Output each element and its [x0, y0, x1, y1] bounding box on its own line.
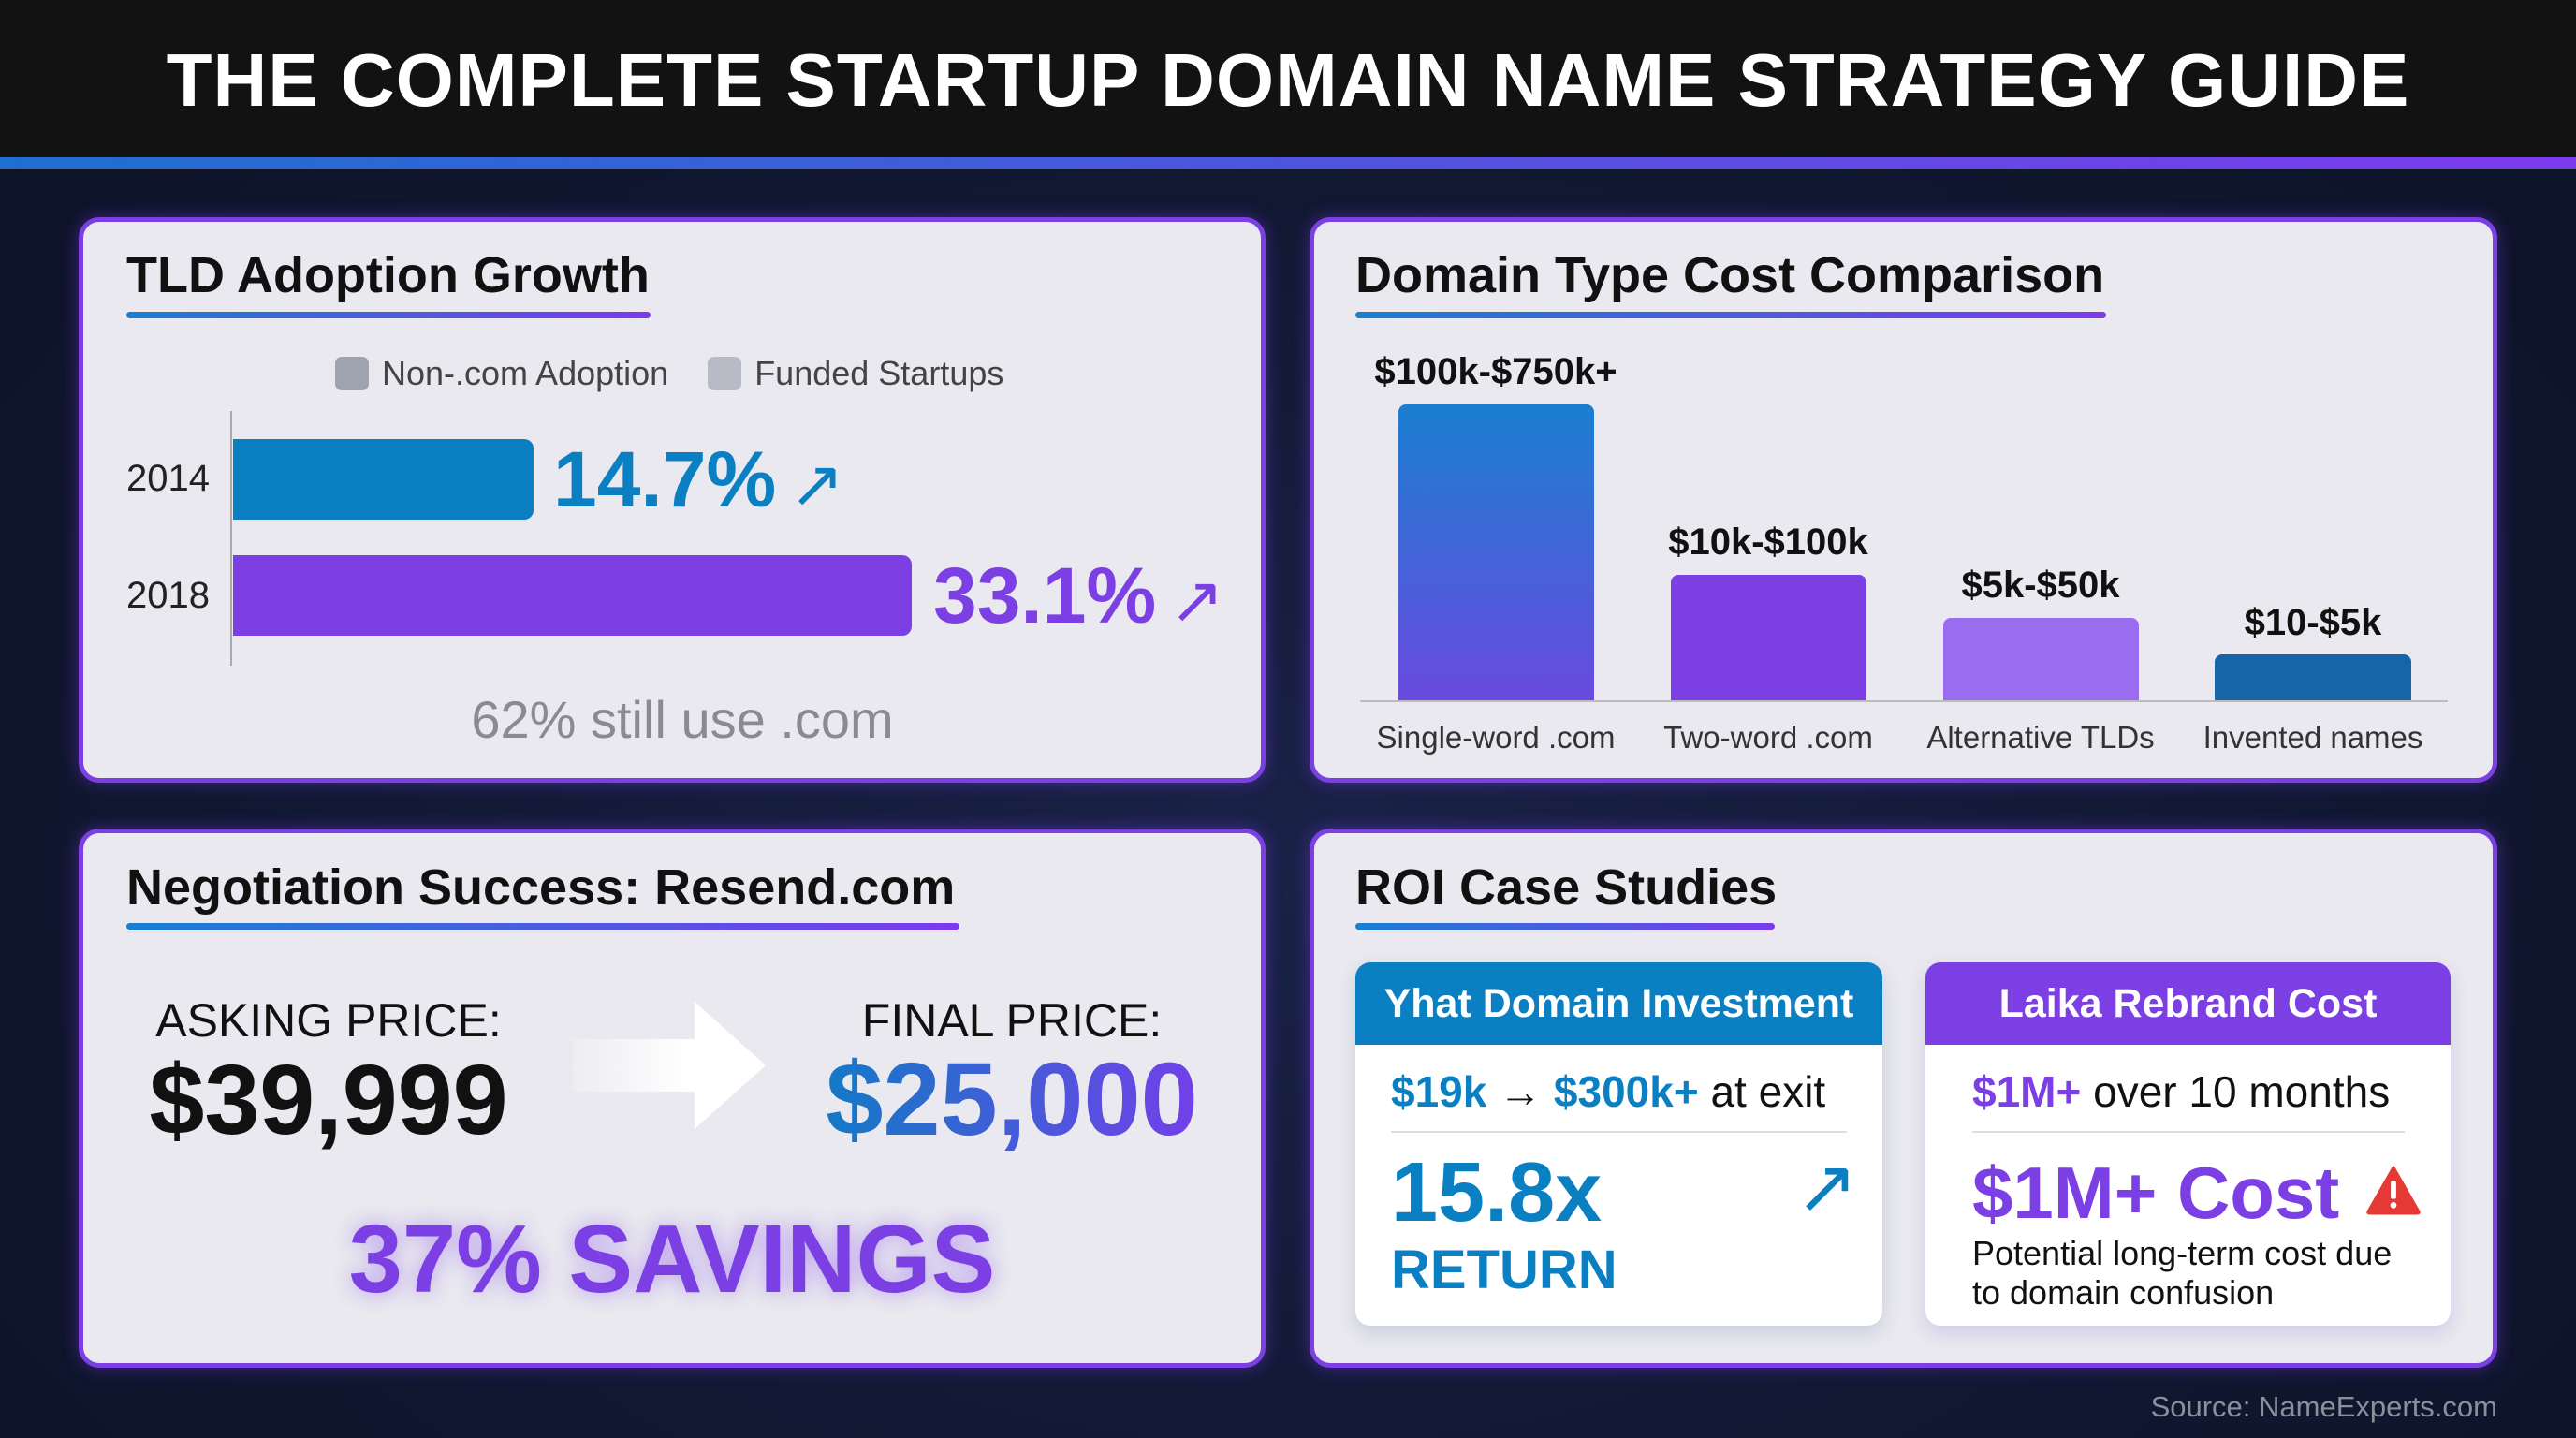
card header: Laika Rebrand Cost: [1999, 981, 2377, 1026]
icon: arrow up-right: ↗: [1795, 1145, 1858, 1228]
bar chart: costs: Invented names: [2203, 720, 2422, 755]
description: to domain confusion: [1972, 1273, 2274, 1312]
baseline: [1360, 700, 2448, 702]
bar: two-word .com: [1671, 575, 1866, 700]
description: Potential long-term cost due: [1972, 1234, 2392, 1272]
bar chart: adoption: [126, 435, 1224, 639]
final price block: $25,000: [826, 1042, 1198, 1157]
arrow: right: [600, 1002, 766, 1129]
label 2014: 2014: [126, 458, 210, 499]
card stat line: $19k → $300k+ at exit: [1391, 1067, 1825, 1116]
header gradient line: [0, 157, 2576, 169]
heading: Negotiation Success: Negotiation Success: Resend.com: [126, 859, 955, 916]
value 14.7%: 14.7%↗: [553, 435, 844, 523]
final price block: FINAL PRICE:: [862, 994, 1162, 1047]
title: THE COMPLETE STARTUP DOMAIN NAME STRATEGY GUIDE: [167, 38, 2409, 122]
note: 62% still use .com: 62% still use .com: [471, 690, 894, 749]
panel: domain type cost comparison: [1310, 217, 2497, 783]
card: Laika: [1925, 962, 2451, 1326]
big cost: $1M+ Cost: [1972, 1152, 2339, 1234]
bar chart: costs: Two-word .com: [1663, 720, 1873, 755]
card: Yhat: RETURN: [1391, 1240, 1617, 1300]
legend: Non-.com Adoption Funded Startups: [382, 354, 1003, 392]
panel: ROI case studies: [1310, 829, 2497, 1368]
card: Yhat: [1355, 962, 1882, 1326]
value 33.1%: 33.1%↗: [933, 551, 1224, 639]
bar chart: costs: $10k-$100k: [1668, 521, 1868, 563]
label 2018: 2018: [126, 575, 210, 616]
icon: warning: [2366, 1166, 2421, 1215]
source: Source: NameExperts.com: [2151, 1390, 2497, 1423]
bar chart: costs: $10-$5k: [2245, 602, 2381, 643]
heading: Domain Type Cost Comparison: Domain Type Cost Comparison: [1355, 247, 2104, 303]
description: [1972, 1234, 2392, 1312]
panel: negotiation success: [79, 829, 1266, 1368]
card stat line: $1M+ over 10 months: [1972, 1067, 2390, 1116]
big return: 15.8x: [1391, 1146, 1602, 1240]
bar chart: costs: $100k-$750k+: [1374, 351, 1617, 392]
asking price block: ASKING PRICE:: [155, 994, 502, 1047]
card header: Yhat Domain Investment: [1384, 981, 1853, 1026]
axis line: [230, 411, 232, 666]
bar: alternative TLDs: [1943, 618, 2139, 700]
asking price block: [149, 994, 508, 1155]
heading: TLD Adoption Growth: TLD Adoption Growth: [126, 247, 650, 303]
bar 2018: [233, 555, 912, 636]
asking price block: $39,999: [149, 1045, 508, 1155]
bar chart: costs: $5k-$50k: [1961, 565, 2120, 606]
card header: [1355, 962, 1882, 1045]
header bar: [0, 0, 2576, 157]
bar chart: costs: [1360, 351, 2448, 755]
bar: invented names: [2215, 654, 2411, 700]
bar chart: costs: Alternative TLDs: [1926, 720, 2155, 755]
heading: ROI Case Studies: ROI Case Studies: [1355, 859, 1777, 916]
panel: TLD adoption growth: [79, 217, 1266, 783]
savings callout: 37% SAVINGS: [349, 1205, 995, 1313]
bar 2014: [233, 439, 534, 520]
bar: single-word .com: [1398, 404, 1594, 700]
card header: [1925, 962, 2451, 1045]
category labels: Single-word .com: [1377, 720, 1615, 755]
